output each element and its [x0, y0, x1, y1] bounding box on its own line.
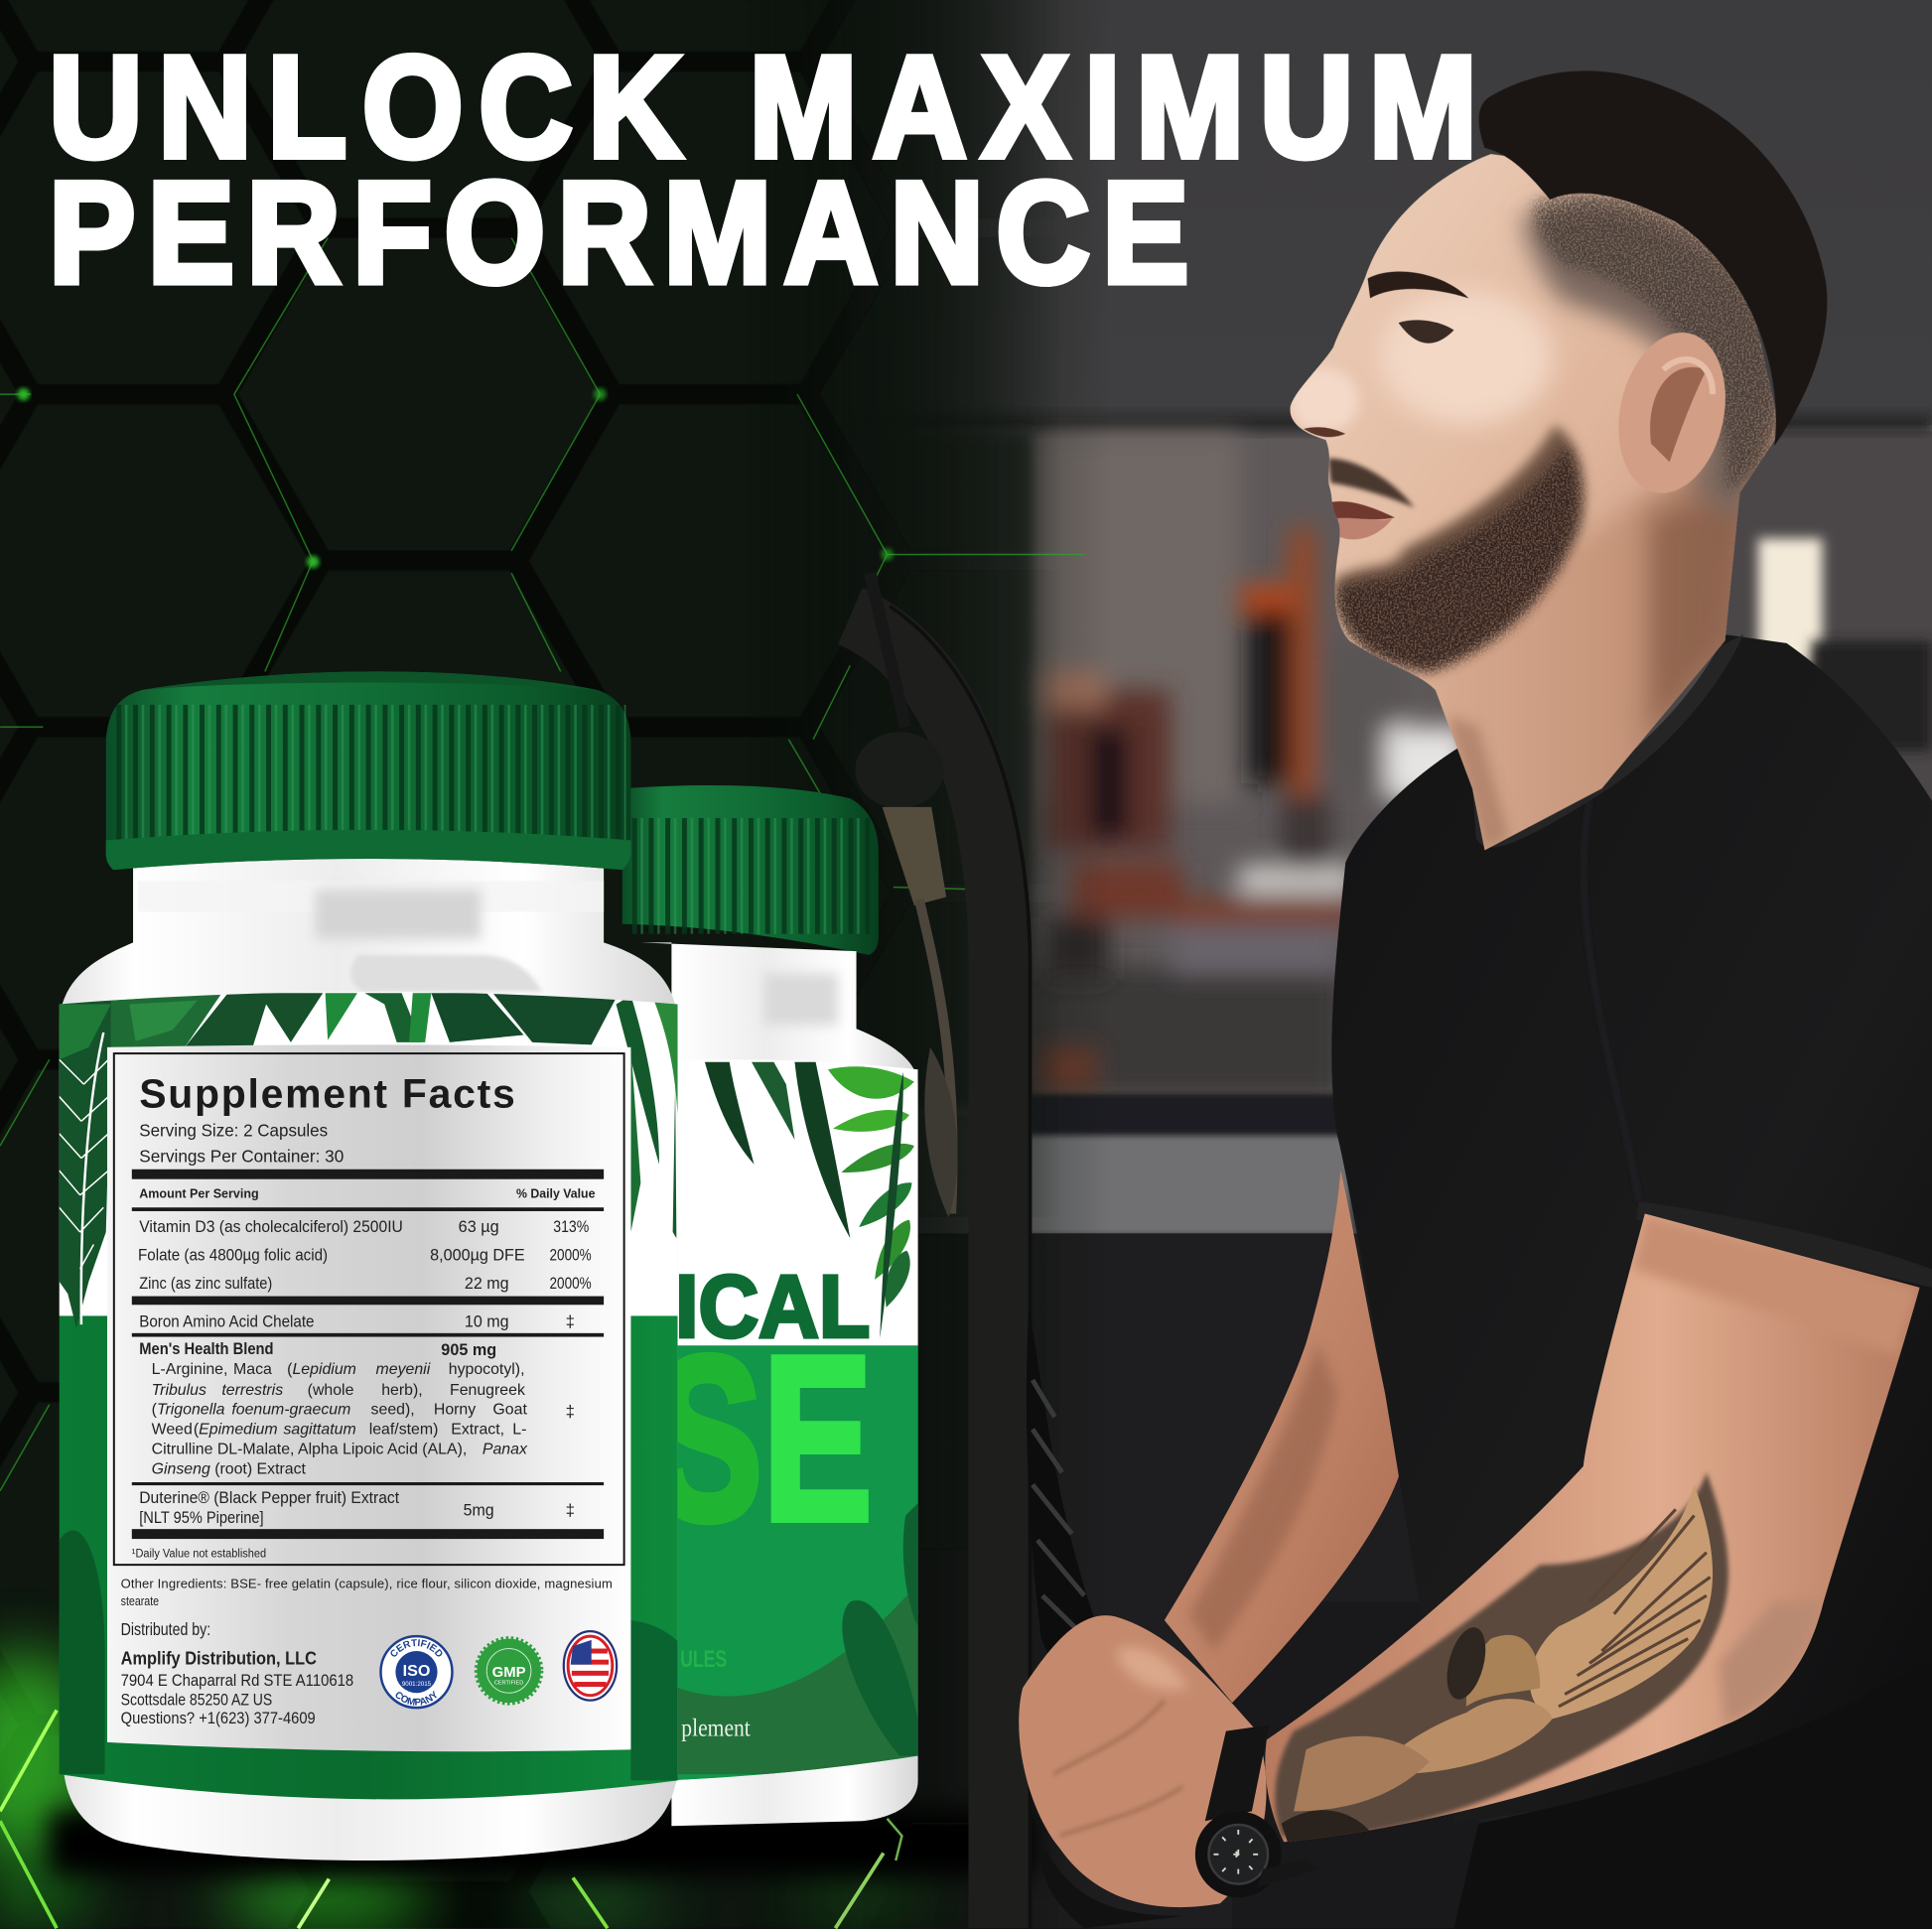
men's health blend: Goat	[492, 1402, 527, 1419]
man: far arm	[1165, 1171, 1402, 1703]
boron row: ‡	[566, 1312, 575, 1331]
glow: neon green hexagon edges at bottom	[0, 1651, 1035, 1928]
man: torso and shirt	[1331, 634, 1932, 1824]
men's health blend: (Trigonella	[152, 1402, 224, 1419]
men's health blend	[139, 1339, 575, 1477]
vitamin rows	[138, 1217, 592, 1293]
vitamin rows: 63 µg	[459, 1217, 499, 1236]
title: unlock maximum performance: UNLOCK MAXIMUM	[49, 27, 1477, 188]
eyebrow	[1368, 271, 1468, 298]
men's health blend: Horny	[434, 1402, 476, 1419]
back bottle product name fragments: ICAL	[675, 1257, 870, 1356]
rope	[1027, 1307, 1115, 1707]
product bottle: back	[622, 785, 918, 1826]
other ingredients: Other Ingredients: BSE- free gelatin (capsule), rice flour, silicon dioxide, magnesium	[121, 1577, 613, 1591]
vitamin rows: 22 mg	[465, 1274, 509, 1293]
vitamin rows: 8,000µg DFE	[430, 1246, 525, 1265]
front bottle label	[60, 980, 678, 1821]
distributor address: Amplify Distribution, LLC	[121, 1648, 317, 1669]
shirt collar	[1472, 634, 1743, 848]
serving info	[139, 1120, 344, 1166]
badge: ISO certified: 9001:2015	[402, 1681, 432, 1688]
distributor address: Questions? +1(623) 377-4609	[121, 1709, 316, 1727]
men's health blend: L-Arginine,	[152, 1361, 227, 1378]
men's health blend: (Lepidium	[287, 1361, 356, 1378]
nostril	[1304, 427, 1345, 437]
men's health blend: (Epimedium	[194, 1422, 278, 1439]
men's health blend: 905 mg	[441, 1340, 496, 1359]
shirt sleeve hem	[1636, 1201, 1932, 1288]
men's health blend: Ginseng (root) Extract	[152, 1460, 307, 1477]
duterine row: 5mg	[464, 1501, 494, 1520]
men's health blend: Maca	[233, 1361, 272, 1378]
tattoo: wing	[1275, 1472, 1728, 1842]
back bottle leaves	[705, 1062, 918, 1338]
boron row: Boron Amino Acid Chelate	[139, 1312, 314, 1331]
man: near arm with tattoo	[1265, 1213, 1920, 1842]
badge: ISO certified: ISO	[403, 1662, 430, 1680]
badge: GMP certified: GMP	[492, 1665, 526, 1681]
men's health blend: hypocotyl),	[449, 1361, 525, 1378]
front bottle cap	[106, 671, 630, 870]
table header	[139, 1185, 595, 1200]
blurred orange gym equipment	[1041, 528, 1466, 1090]
vitamin rows: 313%	[553, 1217, 589, 1236]
men's health blend: Extract,	[451, 1422, 504, 1439]
front bottle leaves: left frond	[60, 1001, 111, 1328]
back bottle cap	[622, 785, 879, 955]
ear	[1604, 323, 1739, 503]
men's health blend: Panax	[483, 1441, 528, 1457]
men's health blend: leaf/stem)	[369, 1422, 438, 1439]
men's health blend: Weed	[152, 1422, 193, 1439]
men's health blend: Fenugreek	[450, 1382, 525, 1399]
vitamin rows: Folate (as 4800µg folic acid)	[138, 1246, 328, 1265]
front bottle white body	[60, 857, 678, 1860]
mouth	[1328, 501, 1395, 519]
badge: ISO certified: COMPANY	[395, 1690, 437, 1706]
back bottle label: plement	[681, 1716, 751, 1742]
men's health blend: (whole	[308, 1382, 354, 1399]
badge: USA flag	[564, 1631, 617, 1701]
stubble beard	[1334, 425, 1584, 671]
vitamin rows: 2000%	[550, 1246, 592, 1265]
man: wristwatch	[1195, 1724, 1318, 1897]
back bottle body	[640, 942, 918, 1826]
distributor address: 7904 E Chaparral Rd STE A110618	[121, 1671, 353, 1690]
boron row: 10 mg	[465, 1312, 509, 1331]
vitamin rows: Vitamin D3 (as cholecalciferol) 2500IU	[139, 1217, 403, 1236]
back bottle label: ULES	[680, 1646, 727, 1672]
heading: supplement facts: Supplement Facts	[139, 1071, 515, 1117]
boron row	[139, 1312, 575, 1331]
duterine row: ‡	[566, 1501, 575, 1520]
footnote: ¹Daily Value not established	[132, 1547, 266, 1561]
back bottle label	[653, 1059, 918, 1780]
distributor address: Distributed by:	[121, 1619, 210, 1639]
men's health blend: Tribulus	[152, 1382, 207, 1399]
men's health blend: meyenii	[376, 1361, 431, 1378]
background: dark hexagon panel fading into photo	[0, 0, 1092, 1928]
badge: GMP certified: CERTIFIED	[494, 1681, 523, 1687]
vitamin rows: Zinc (as zinc sulfate)	[139, 1274, 272, 1293]
vitamin rows: 2000%	[550, 1274, 592, 1293]
duterine row: [NLT 95% Piperine]	[139, 1508, 264, 1527]
badge: ISO certified: CERTIFIED	[390, 1639, 443, 1657]
men's health blend: seed),	[371, 1402, 415, 1419]
men's health blend: herb),	[381, 1382, 423, 1399]
men's health blend: Men's Health Blend	[139, 1339, 274, 1358]
men's health blend: sagittatum	[283, 1422, 356, 1439]
supplement facts panel	[107, 1044, 631, 1751]
badge: ISO certified	[379, 1634, 454, 1710]
serving info: Serving Size: 2 Capsules	[139, 1120, 328, 1140]
other ingredients	[121, 1577, 613, 1608]
man: hand gripping rope	[1019, 1615, 1267, 1928]
men's health blend: L-	[512, 1422, 526, 1439]
serving info: Servings Per Container: 30	[139, 1146, 344, 1166]
duterine row	[139, 1488, 575, 1527]
men's health blend: terrestris	[221, 1382, 283, 1399]
men's health blend: foenum-graecum	[231, 1402, 350, 1419]
product bottle: front	[60, 671, 678, 1860]
badge: GMP certified	[477, 1639, 541, 1703]
man: neck and head	[1282, 70, 1827, 863]
distributor address	[121, 1619, 353, 1727]
eye	[1399, 320, 1453, 344]
front bottle leaves: right frond	[617, 996, 678, 1238]
front bottle leaves: top band	[108, 993, 617, 1047]
cable machine: curved bar, ball stop, carabiner	[850, 573, 1031, 1928]
man: pants	[1453, 1657, 1932, 1928]
title: unlock maximum performance	[49, 27, 1477, 314]
other ingredients: stearate	[121, 1593, 159, 1608]
table header: % Daily Value	[516, 1185, 595, 1200]
distributor address: Scottsdale 85250 AZ US	[121, 1691, 272, 1710]
table header: Amount Per Serving	[139, 1185, 259, 1200]
men's health blend: Citrulline DL-Malate, Alpha Lipoic Acid (ALA),	[152, 1441, 467, 1457]
duterine row: Duterine® (Black Pepper fruit) Extract	[139, 1488, 399, 1507]
title: unlock maximum performance: PERFORMANCE	[49, 153, 1188, 314]
men's health blend: ‡	[566, 1402, 575, 1421]
thin green hexagon edge highlights	[0, 238, 1084, 1824]
hair fade side	[1522, 199, 1784, 523]
back bottle label: SE	[653, 1308, 873, 1569]
hair top	[1479, 70, 1827, 446]
